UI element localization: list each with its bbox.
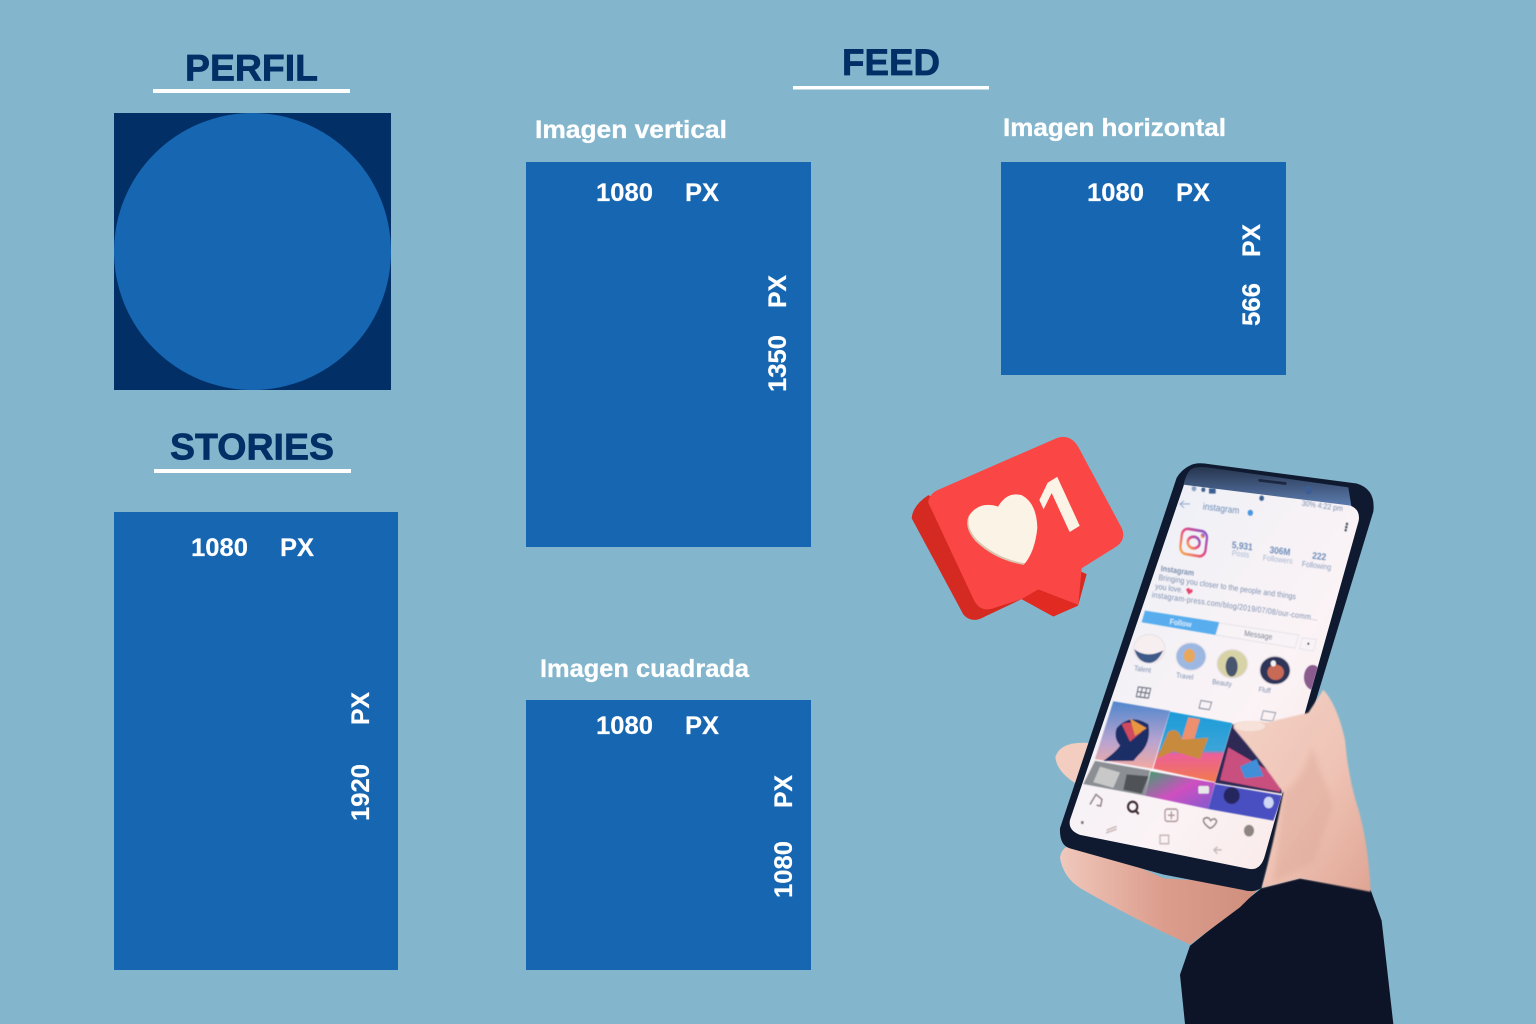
square height label [770, 775, 798, 898]
lower fingers [1060, 845, 1263, 945]
panel: imagen vertical [526, 116, 811, 547]
profile square with circle [114, 113, 391, 390]
profile bio: you love. [1155, 581, 1184, 595]
message button [1216, 623, 1317, 651]
profile stats [1231, 539, 1332, 572]
stories rectangle [114, 512, 398, 970]
stories width label [191, 534, 314, 562]
story highlights [1134, 635, 1321, 695]
profile stats: 222 [1312, 550, 1327, 562]
horizontal width label: 1080 [1087, 179, 1144, 207]
palm shading [1273, 747, 1333, 882]
horizontal rectangle [1001, 162, 1286, 375]
heading: stories: STORIES [170, 426, 334, 468]
screen content [1081, 486, 1348, 854]
vertical height label [764, 275, 792, 392]
story highlights: Fluff [1258, 686, 1271, 695]
profile stats: Following [1301, 559, 1332, 572]
stories height label [347, 692, 375, 821]
menu dots [1344, 523, 1348, 532]
instagram logo [1180, 528, 1208, 557]
heading: perfil: PERFIL [185, 48, 318, 88]
follow button [1142, 611, 1219, 635]
story highlights: Travel [1176, 672, 1194, 682]
story highlights: Beauty [1212, 679, 1233, 689]
vertical width label: 1080 [596, 179, 653, 207]
profile stats: 306M [1269, 544, 1291, 558]
vertical height label: PX [764, 275, 792, 308]
profile bio [1151, 564, 1318, 623]
sleeve [1180, 878, 1393, 1024]
profile stats: Followers [1262, 553, 1293, 566]
stories width label: PX [280, 534, 314, 562]
status bar: 30% 4:22 pm [1301, 498, 1343, 513]
horizontal height label: 566 [1238, 283, 1266, 326]
square width label: 1080 [596, 712, 653, 740]
speaker [1258, 479, 1287, 485]
label: imagen vertical: Imagen vertical [535, 116, 727, 144]
photo grid [1083, 701, 1287, 821]
vertical width label: PX [685, 179, 719, 207]
message button: Message [1244, 628, 1273, 642]
heart [967, 494, 1037, 565]
story highlights: Talent [1134, 665, 1151, 675]
horizontal width label: PX [1176, 179, 1210, 207]
bottom navigation [1081, 794, 1254, 854]
thumb and palm [1233, 690, 1371, 892]
panel: stories [114, 426, 398, 970]
square height label: 1080 [770, 841, 798, 898]
vertical height label: 1350 [764, 335, 792, 392]
square width label [596, 712, 719, 740]
square rectangle [526, 700, 811, 970]
profile bio: Bringing you closer to the people and things [1158, 572, 1297, 601]
profile bio: instagram-press.com/blog/2019/07/08/our-comm... [1151, 590, 1318, 623]
panel: imagen horizontal [1001, 114, 1286, 375]
number one: 1 [1022, 450, 1106, 571]
profile bio: Instagram [1160, 564, 1195, 578]
phone [1060, 463, 1374, 891]
grid tabs [1136, 687, 1276, 721]
stories height label: PX [347, 692, 375, 725]
profile stats: Posts [1231, 548, 1250, 560]
panel: imagen cuadrada [526, 655, 811, 970]
vertical rectangle [526, 162, 811, 547]
status bar [1192, 486, 1343, 513]
screen [1070, 485, 1359, 869]
label: imagen horizontal: Imagen horizontal [1003, 114, 1226, 142]
stories height label: 1920 [347, 764, 375, 821]
square width label: PX [685, 712, 719, 740]
illustration: hand holding phone [1055, 463, 1393, 1024]
profile name [1180, 501, 1253, 516]
panel: perfil [114, 48, 391, 390]
follow button: Follow [1169, 617, 1192, 629]
thumb nail highlight [1235, 721, 1265, 731]
icon: like notification badge [912, 437, 1123, 620]
horizontal width label [1087, 179, 1210, 207]
top bezel glare [1183, 467, 1352, 508]
label: imagen cuadrada: Imagen cuadrada [540, 655, 750, 683]
vertical width label [596, 179, 719, 207]
heading: feed: FEED [842, 42, 940, 83]
square height label: PX [770, 775, 798, 808]
profile name: instagram [1202, 501, 1240, 516]
stories width label: 1080 [191, 534, 248, 562]
profile stats: 5,931 [1231, 539, 1253, 553]
camera [1305, 486, 1312, 494]
horizontal height label [1238, 224, 1266, 326]
horizontal height label: PX [1238, 224, 1266, 257]
heading: feed [793, 42, 989, 90]
left fingertip [1055, 743, 1100, 785]
